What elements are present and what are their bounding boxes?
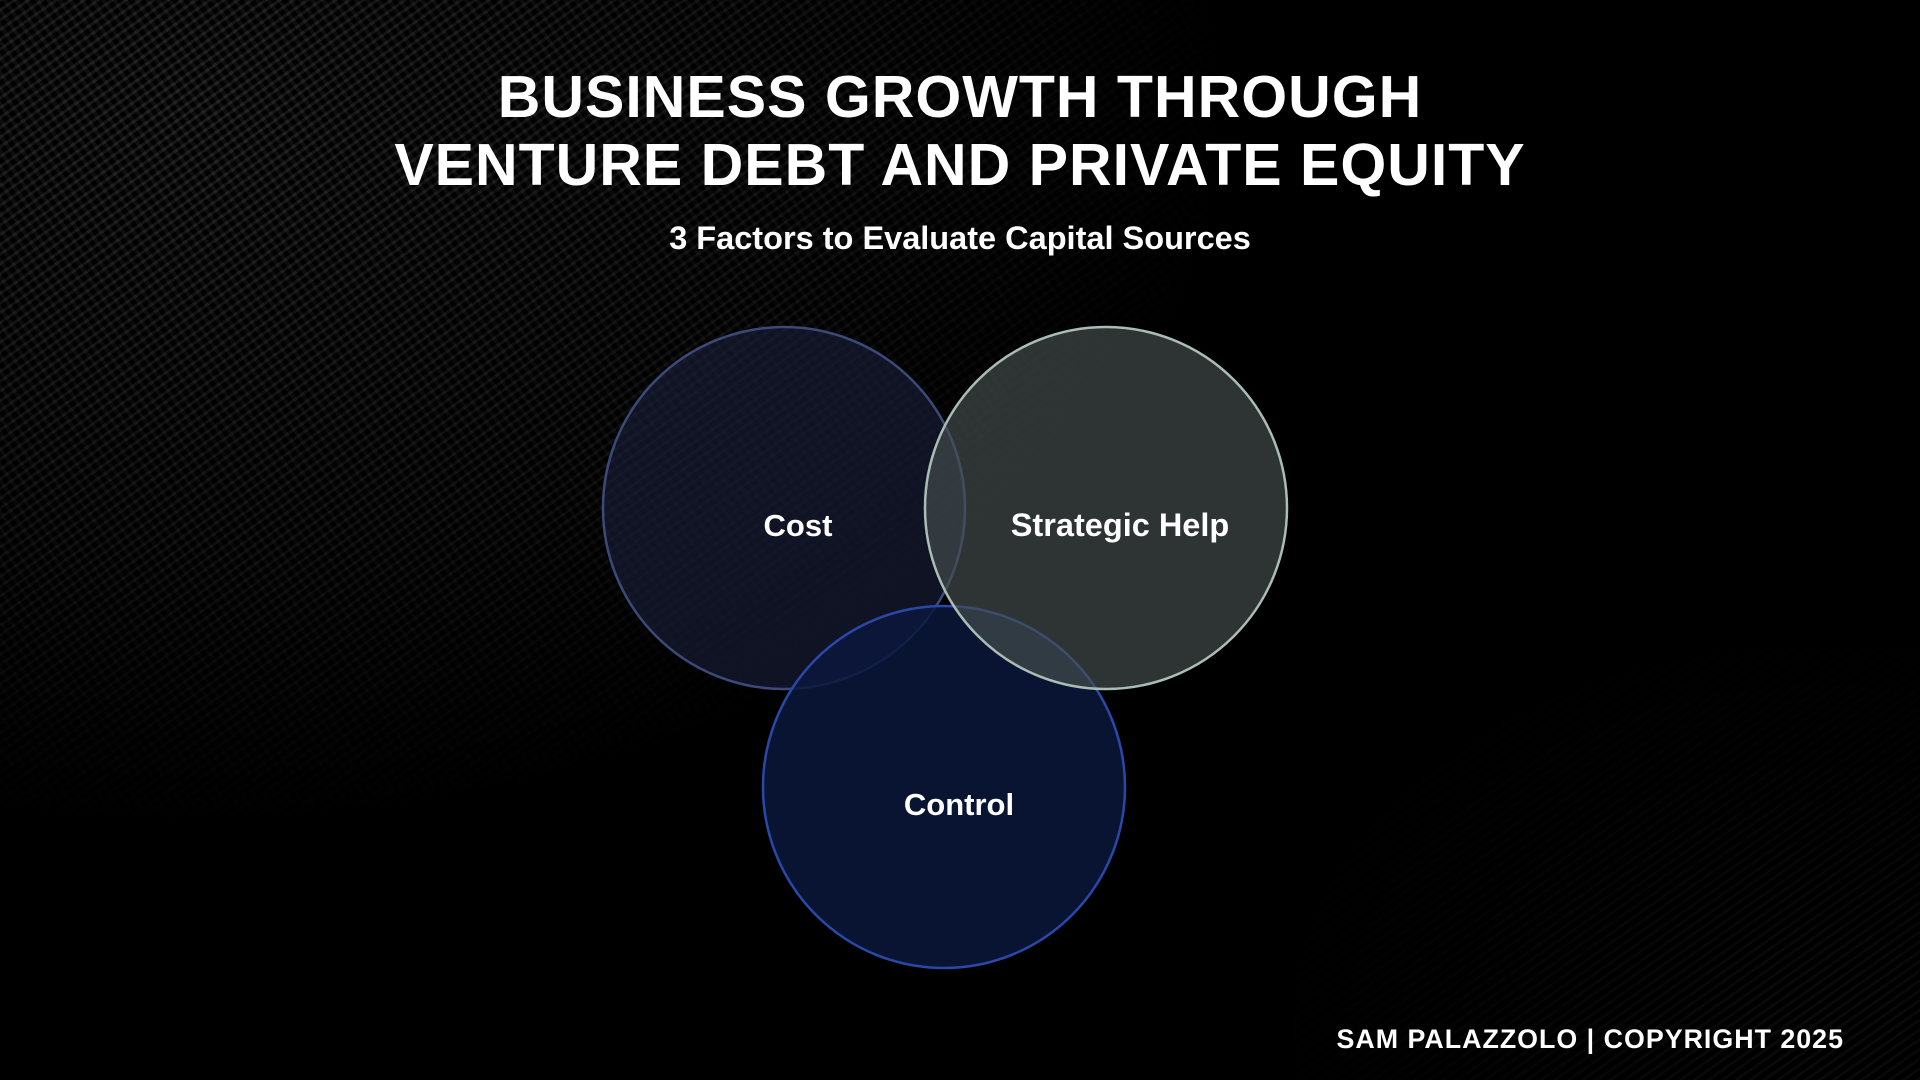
- circle: control: [763, 606, 1125, 968]
- circle: cost: [603, 327, 965, 689]
- title: BUSINESS GROWTH THROUGH: [498, 64, 1422, 130]
- circle: control: Control: [904, 787, 1014, 822]
- title: [394, 64, 1526, 198]
- circle: strategic help: [925, 327, 1287, 689]
- circle: strategic help: Strategic Help: [1011, 507, 1229, 543]
- subtitle: 3 Factors to Evaluate Capital Sources: [669, 220, 1251, 256]
- title: VENTURE DEBT AND PRIVATE EQUITY: [394, 132, 1526, 198]
- footer credit: SAM PALAZZOLO | COPYRIGHT 2025: [1336, 1024, 1844, 1054]
- circle: cost: Cost: [764, 508, 832, 543]
